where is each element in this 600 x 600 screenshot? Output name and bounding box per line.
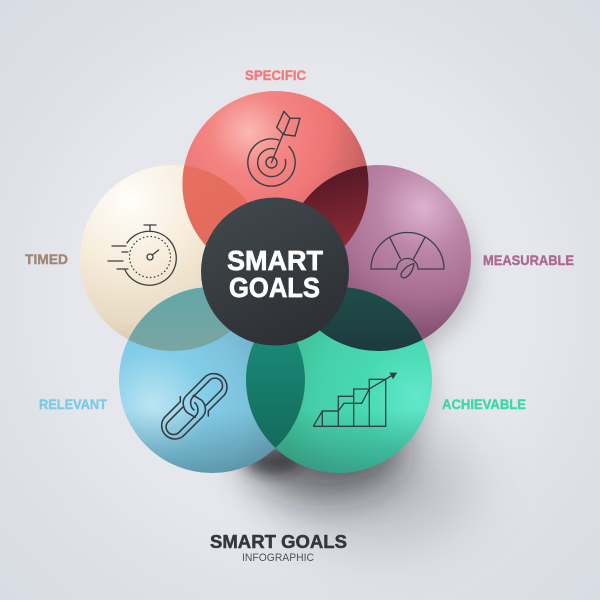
circle: achievable [246, 287, 432, 473]
center title: SMART [227, 245, 323, 276]
label: relevant: RELEVANT [39, 396, 107, 412]
center title: GOALS [229, 272, 320, 303]
footer title: SMART GOALS [210, 531, 347, 552]
label: achievable: ACHIEVABLE [442, 396, 526, 412]
overlap: achievable and relevant [246, 342, 305, 448]
circle: measurable [285, 165, 471, 351]
label: specific: SPECIFIC [245, 68, 306, 83]
circle: relevant [119, 287, 305, 473]
label: measurable: MEASURABLE [483, 252, 574, 268]
icon: chain link [162, 374, 227, 439]
drop shadow [244, 188, 476, 545]
circle: timed [80, 165, 266, 351]
overlap: measurable and achievable [320, 288, 423, 351]
icon: gauge [371, 232, 444, 278]
overlap: specific and timed [182, 166, 248, 246]
footer title [210, 531, 347, 564]
overlap: specific and measurable [303, 166, 368, 246]
circle: specific [182, 91, 368, 277]
overlap: relevant and timed [128, 288, 231, 351]
icon: bar chart with arrow [313, 373, 396, 426]
center title [227, 245, 323, 303]
center circle [201, 198, 349, 346]
label: timed: TIMED [25, 251, 68, 267]
icon: stopwatch [108, 225, 176, 285]
icon: target with arrow [248, 111, 300, 186]
footer title: INFOGRAPHIC [242, 552, 314, 564]
